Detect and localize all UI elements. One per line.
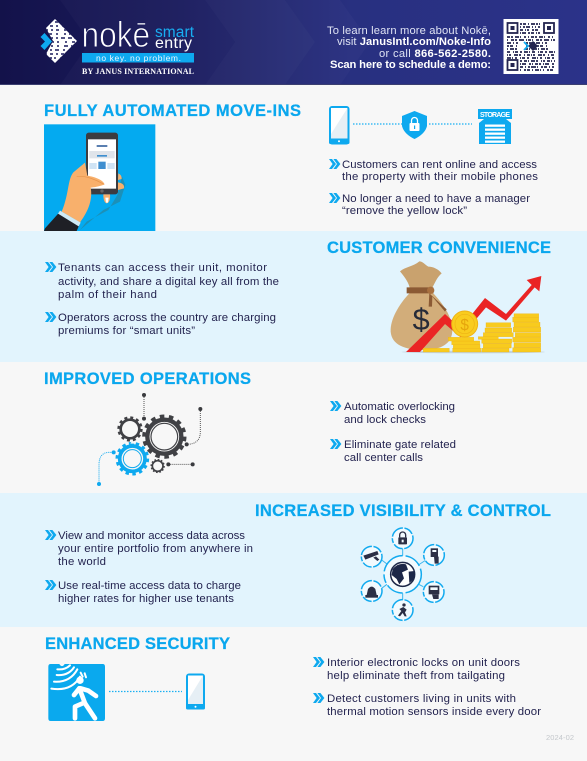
heading: FULLY AUTOMATED MOVE-INS	[44, 102, 301, 120]
bullet: overlocking: and lock checks	[344, 414, 426, 426]
illustration: gears	[97, 393, 202, 486]
panel: fully automated move-ins	[44, 102, 538, 231]
bullet: rent online: Customers can rent online and access	[342, 159, 537, 171]
panel: improved operations	[44, 370, 456, 486]
bullet: gate calls: Eliminate gate related	[344, 439, 456, 451]
document code: 2024-02	[546, 733, 574, 742]
header contact text: To learn learn more about Nokē,	[327, 25, 491, 37]
header banner	[0, 0, 587, 85]
icon: smartphone	[186, 674, 205, 710]
bullet: yellow lock	[329, 193, 530, 217]
connector dots	[109, 690, 182, 692]
icon: smartphone	[329, 107, 350, 144]
panel: enhanced security	[45, 635, 541, 721]
panel: customer convenience	[45, 239, 551, 353]
illustration: security network around globe	[361, 528, 444, 620]
bullet: monitor access data: your entire portfolio from anywhere in	[58, 543, 253, 555]
logo byline: BY JANUS INTERNATIONAL	[82, 67, 194, 76]
heading: INCREASED VISIBILITY & CONTROL	[255, 502, 551, 520]
illustration: hand holding phone	[44, 124, 155, 231]
bullet: interior locks	[313, 657, 520, 682]
icon: logo diamond	[40, 19, 80, 63]
header contact text: visit JanusIntl.com/Noke-Info	[337, 36, 491, 48]
heading: CUSTOMER CONVENIENCE	[327, 239, 551, 257]
bullet: yellow lock: No longer a need to have a manager	[342, 193, 530, 205]
bullet: tenants: palm of their hand	[58, 289, 157, 301]
bullet: operators	[45, 312, 276, 337]
bullet: interior locks: help eliminate theft from tailgating	[327, 670, 505, 682]
logo tagline bar: no key. no problem.	[96, 53, 181, 63]
bullet: gate calls: call center calls	[344, 452, 423, 464]
icon: QR code	[504, 19, 558, 74]
logo smart entry: smart	[155, 24, 195, 41]
bullet: yellow lock: “remove the yellow lock”	[342, 205, 467, 217]
icon: shield with padlock	[402, 111, 427, 139]
heading: ENHANCED SECURITY	[45, 635, 230, 653]
logo smart entry: entry	[155, 35, 192, 52]
bullet: tenants: Tenants can access their unit, monitor	[58, 262, 267, 274]
logo wordmark: nokē	[82, 15, 150, 55]
header contact text: or call 866-562-2580.	[379, 48, 491, 60]
bullet: motion sensors: Detect customers living in units with	[327, 693, 516, 705]
bullet: real-time rates	[45, 580, 241, 605]
illustration: money bag and rising arrow: $	[413, 303, 430, 337]
bullet: tenants	[45, 262, 279, 301]
logo	[40, 19, 194, 74]
bullet: monitor access data: View and monitor access data across	[58, 530, 245, 542]
bullet: overlocking	[330, 401, 455, 426]
connector dots	[353, 123, 472, 125]
icon: storage building: STORAGE	[480, 112, 510, 119]
bullet: tenants: activity, and share a digital key all from the	[58, 276, 279, 288]
panel: increased visibility and control	[45, 502, 551, 620]
bullet: motion sensors: thermal motion sensors inside every door	[327, 706, 541, 718]
icon: motion sensor detecting person	[48, 664, 105, 721]
bullet: monitor access data: the world	[58, 556, 106, 568]
heading: IMPROVED OPERATIONS	[44, 370, 251, 388]
bullet: real-time rates: higher rates for higher use tenants	[58, 593, 234, 605]
bullet: operators: Operators across the country are charging	[58, 312, 276, 324]
bullet: operators: premiums for “smart units”	[58, 325, 195, 337]
bullet: monitor access data	[45, 530, 253, 568]
bullet: interior locks: Interior electronic locks on unit doors	[327, 657, 520, 669]
icon: storage building	[478, 109, 512, 144]
illustration: money bag and rising arrow: $	[460, 317, 469, 334]
bullet: gate calls	[330, 439, 456, 464]
bullet: real-time rates: Use real-time access data to charge	[58, 580, 241, 592]
bullet: rent online: the property with their mobile phones	[342, 171, 538, 183]
logo smart entry	[155, 24, 195, 52]
bullet: motion sensors	[313, 693, 541, 718]
header contact text: Scan here to schedule a demo:	[330, 59, 491, 71]
illustration: money bag and rising arrow	[391, 261, 545, 353]
bullet: overlocking: Automatic overlocking	[344, 401, 455, 413]
header contact text	[327, 25, 491, 71]
bullet: rent online	[329, 159, 538, 183]
